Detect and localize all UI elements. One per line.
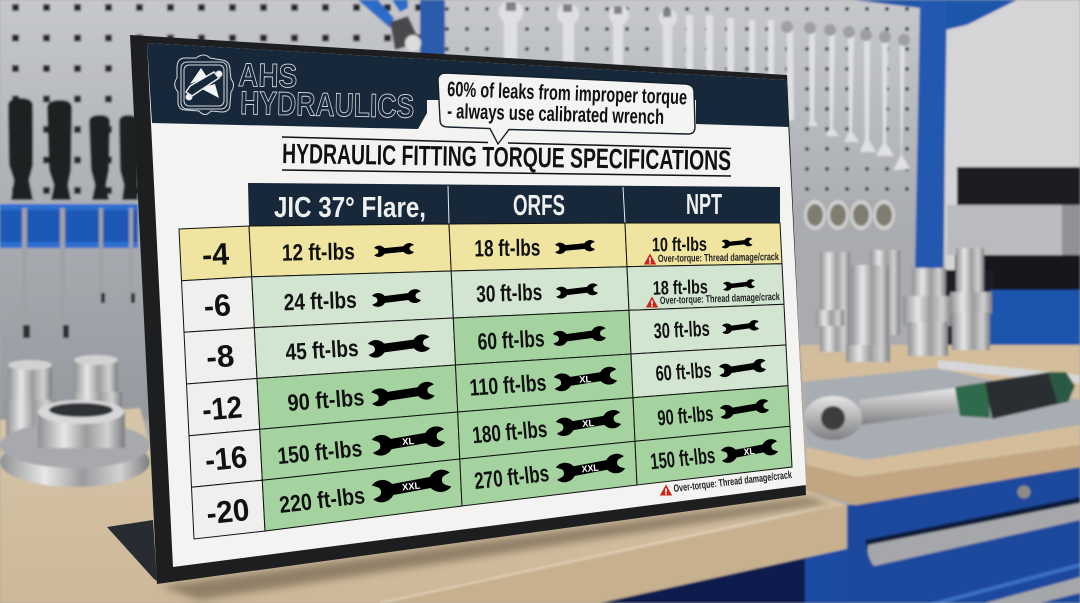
right workbench surface xyxy=(800,345,1080,477)
hanging wrenches xyxy=(499,0,910,170)
row: -6: 24 ft-lbs xyxy=(283,287,357,315)
row: -6 xyxy=(182,264,784,332)
row: -12 xyxy=(186,345,788,436)
row: -12: 110 ft-lbs xyxy=(469,369,547,401)
row: -20: 220 ft-lbs xyxy=(278,482,366,518)
sign white panel xyxy=(147,43,806,567)
screwdriver rack xyxy=(0,204,138,248)
over-torque footnote: Over-torque: Thread damage/crack xyxy=(673,469,793,495)
row: -16: XL xyxy=(582,418,595,430)
row: -4 xyxy=(179,223,782,281)
row: -16: -16 xyxy=(203,439,249,478)
row: -16: 150 ft-lbs xyxy=(276,435,363,469)
torque wrench xyxy=(804,372,1075,440)
long steel bar xyxy=(938,360,1080,383)
row: -16: XL xyxy=(402,436,415,448)
row: -16: 90 ft-lbs xyxy=(656,402,714,430)
logo wordmark: HYDRAULICS xyxy=(240,84,415,125)
socket rail xyxy=(795,200,895,230)
row: -8: 30 ft-lbs xyxy=(653,317,710,343)
row: -16: 180 ft-lbs xyxy=(471,416,548,448)
row: -20: XL xyxy=(743,446,755,458)
row: -6: 18 ft-lbs xyxy=(653,276,708,300)
under-bench shadow xyxy=(600,558,805,603)
right wall and shelving xyxy=(853,0,1080,350)
board shadow on bench xyxy=(160,497,830,600)
row: -12: XL xyxy=(579,374,592,386)
row: -4: -4 xyxy=(201,236,231,273)
left bench surface xyxy=(0,408,847,603)
table header row: NPT xyxy=(686,189,722,221)
blue pliers xyxy=(358,0,421,51)
sign frame xyxy=(130,35,806,584)
row: -4: 18 ft-lbs xyxy=(474,234,541,262)
callout bubble: - always use calibrated wrench xyxy=(447,100,664,129)
over-torque footnote xyxy=(660,469,793,496)
row: -12: 90 ft-lbs xyxy=(287,384,365,416)
steel fittings on right bench xyxy=(816,248,992,362)
logo wordmark: AHS xyxy=(238,56,298,94)
table header row: JIC 37° Flare, xyxy=(274,192,426,224)
title: HYDRAULIC FITTING TORQUE SPECIFICATIONS xyxy=(282,138,731,176)
screwdrivers xyxy=(8,98,138,338)
row: -16 xyxy=(189,386,790,487)
row: -20: 270 ft-lbs xyxy=(473,460,550,494)
row: -20: XXL xyxy=(402,481,421,493)
row: -8 xyxy=(184,304,786,384)
pegboard wall xyxy=(0,0,925,420)
bench mat xyxy=(803,368,1080,460)
right bench front edge xyxy=(806,445,1080,505)
table header row xyxy=(248,183,780,226)
row: -12: 60 ft-lbs xyxy=(655,358,712,386)
torque chart sign xyxy=(130,35,806,584)
row: -6: -6 xyxy=(203,287,232,324)
row: -4: Over-torque: Thread damage/crack xyxy=(658,251,779,265)
row: -4: 10 ft-lbs xyxy=(652,234,707,256)
table header row: ORFS xyxy=(513,190,565,222)
logo wordmark xyxy=(238,56,415,125)
icon: AHS logo emblem xyxy=(175,55,234,114)
title xyxy=(282,137,731,176)
sign stand foot xyxy=(107,520,157,581)
callout bubble xyxy=(438,73,695,144)
row: -4: 12 ft-lbs xyxy=(282,238,355,266)
header band with logo xyxy=(147,43,789,129)
row: -20: -20 xyxy=(205,492,251,531)
row: -8: -8 xyxy=(205,338,235,375)
row: -8: 60 ft-lbs xyxy=(477,325,545,355)
blue drawer cabinet xyxy=(847,467,1080,603)
row: -12: -12 xyxy=(201,389,244,428)
row: -8: 45 ft-lbs xyxy=(285,335,359,365)
row: -6: Over-torque: Thread damage/crack xyxy=(660,291,780,307)
row: -20: 150 ft-lbs xyxy=(649,443,716,474)
blue upright post xyxy=(420,0,445,60)
row: -20 xyxy=(192,426,792,539)
row: -20: XXL xyxy=(581,463,599,475)
left bench front edge xyxy=(380,505,847,603)
row: -6: 30 ft-lbs xyxy=(476,279,543,307)
callout bubble: 60% of leaks from improper torque xyxy=(447,78,687,109)
left steel fittings xyxy=(0,355,150,487)
